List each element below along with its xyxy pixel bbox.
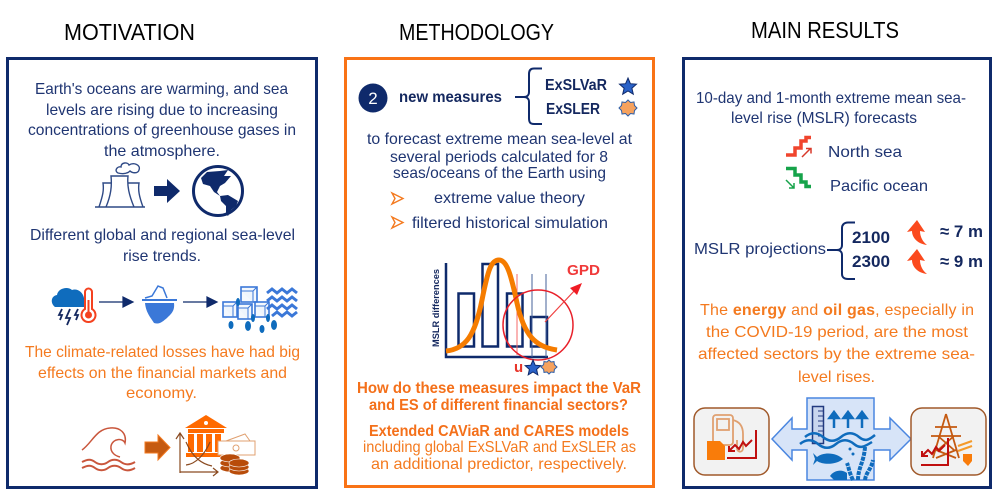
icon: power plant [95,163,145,207]
text: regional trends [30,227,295,265]
text: pacific ocean: Pacific ocean [830,178,928,195]
text: affected sectors: the COVID-19 period, are the most [706,324,969,341]
text: forecast description: to forecast extreme mean sea-level at [367,131,633,148]
text: oceans warming: concentrations of greenhouse gases in [28,122,296,139]
icon: bank, chart, money and coins [176,415,255,476]
panel: main results [684,58,990,488]
bullet: extreme value theory: extreme value theory [434,190,585,207]
chart: MSLR differences with GPD tail: u [514,359,523,376]
panel: methodology [346,58,654,486]
text: extended models: Extended CAViaR and CARES models [369,423,629,440]
badge: number 2: 2 [368,89,378,108]
text: ExSLER: ExSLER [546,101,600,118]
chart: MSLR differences with GPD tail: GPD [567,263,600,279]
text: north sea: North sea [828,144,902,161]
bullet: filtered historical simulation: filtered historical simulation [412,215,608,232]
brace: projections [827,222,855,279]
arrow: plant to globe [154,179,180,203]
text: affected sectors [698,302,975,386]
text: about 9 m: ≈ 9 m [940,252,983,271]
text: forecasts description [696,90,966,127]
text: extended models: an additional predictor, respectively. [371,456,627,473]
heading: methodology: METHODOLOGY [399,19,554,45]
icon: sea wave [82,428,135,470]
icon: green falling stairs [786,168,811,188]
text: regional trends: Different global and regional sea-level [30,227,295,244]
text: about 7 m: ≈ 7 m [940,222,983,241]
text: extended models: including global ExSLVaR and ExSLER as [363,439,636,456]
text: forecast description: several periods calculated for 8 [390,149,608,166]
text: oceans warming: levels are rising due to increasing [46,102,278,119]
heading: main results: MAIN RESULTS [751,17,899,43]
text: forecasts description: level rise (MSLR) forecasts [731,110,917,127]
text: affected sectors: The energy and oil gas, especially in [700,302,974,319]
text: extended models [363,423,636,473]
icon: sea level double arrow [772,398,911,480]
icon: oil and gas sector [694,408,769,475]
text: regional trends: rise trends. [123,248,201,265]
text: climate-related losses: effects on the financial markets and [38,365,287,382]
text: oceans warming: the atmosphere. [104,143,220,160]
icon: iceberg [142,286,177,324]
icon: red curved arrow 2300 [907,249,927,274]
arrow: wave to finance [145,435,170,460]
arrow: iceberg to ice [183,297,217,307]
icon: storm cloud and thermometer [52,288,96,325]
text: forecast description [367,131,633,182]
text: research question: How do these measures impact the VaR [357,380,641,397]
chart: MSLR differences with GPD tail: MSLR differences [431,269,442,347]
icon: blue star [620,78,636,94]
text: 2300: 2300 [852,252,890,271]
icon: red rising stairs [786,138,811,157]
icon: energy sector [911,408,986,475]
text: research question [357,380,641,414]
text: oceans warming: Earth's oceans are warming, and sea [35,81,288,98]
text: affected sectors: level rises. [798,369,875,386]
text: climate-related losses: The climate-related losses have had big [25,344,300,361]
icon: red curved arrow 2100 [907,220,927,245]
text: affected sectors: affected sectors by the extreme sea- [698,346,975,363]
icon: globe [194,166,242,216]
text: forecasts description: 10-day and 1-month extreme mean sea- [696,90,966,107]
heading: motivation: MOTIVATION [64,19,195,45]
panel: motivation [8,58,316,488]
text: ExSLVaR: ExSLVaR [545,77,607,94]
text: MSLR projections: MSLR projections [694,241,826,258]
text: climate-related losses: economy. [126,385,197,402]
chart: MSLR differences with GPD tail [431,260,600,376]
text: new measures: new measures [399,89,502,106]
icon: melting ice cubes and waves [223,287,297,333]
text: oceans warming [28,81,296,160]
brace: measures [515,68,542,124]
badge: number 2 [358,84,388,112]
arrow: storm to iceberg [99,297,133,307]
text: 2100: 2100 [852,228,890,247]
icon: orange star [619,100,637,116]
text: climate-related losses [25,344,300,402]
text: forecast description: seas/oceans of the Earth using [393,165,606,182]
text: research question: and ES of different financial sectors? [369,397,628,414]
